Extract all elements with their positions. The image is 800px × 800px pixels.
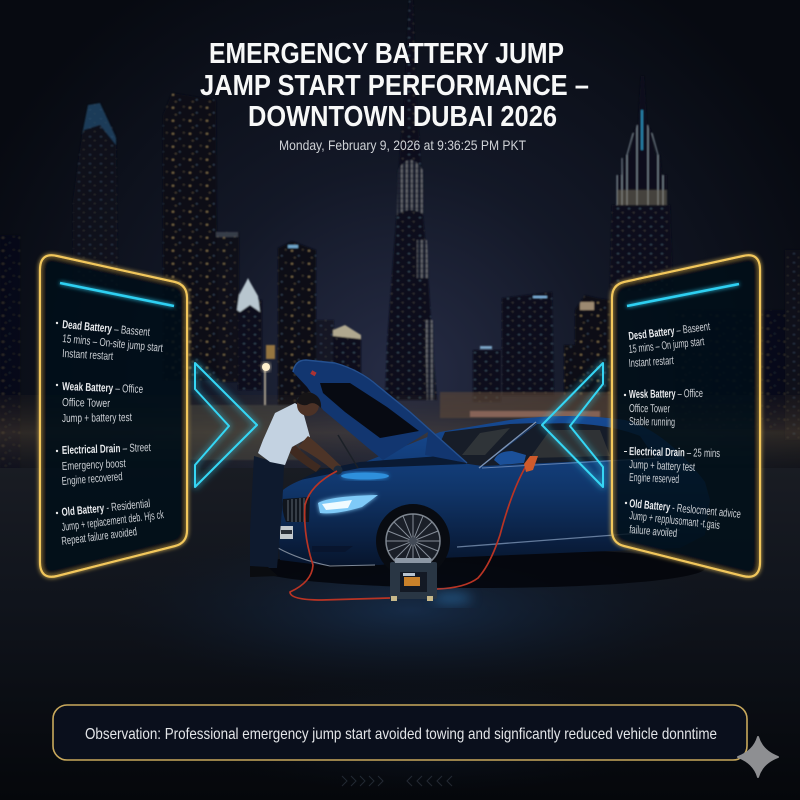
portable jump starter xyxy=(390,558,472,603)
rear arm xyxy=(289,445,321,472)
callout: observation xyxy=(53,705,747,760)
headlight xyxy=(318,495,378,513)
list: left panel text: Dead Battery – Bassent xyxy=(62,319,151,339)
car body xyxy=(278,416,710,565)
list: right panel text: Stable running xyxy=(629,416,675,429)
head xyxy=(297,394,319,416)
title: JAMP START PERFORMANCE – xyxy=(200,70,589,102)
Dubai skyline xyxy=(0,0,800,475)
list: left panel text: Electrical Drain – Street xyxy=(62,442,152,457)
windows xyxy=(436,423,537,466)
list: left panel text: Jump + replacement deb. Hjs ck xyxy=(61,509,165,534)
list: left panel text: Office Tower xyxy=(62,397,110,410)
icon: sparkle star xyxy=(738,737,778,777)
list: right panel text: Old Battery - Reslocment advice xyxy=(629,498,741,521)
date subtitle: Monday, February 9, 2026 at 9:36:25 PM PKT xyxy=(279,137,526,153)
shirt xyxy=(258,403,310,465)
title: DOWNTOWN DUBAI 2026 xyxy=(248,101,557,133)
list: left panel text: Old Battery - Residential xyxy=(61,498,151,519)
list: left panel text: Emergency boost xyxy=(62,458,127,473)
list: left panel text: Engine recovered xyxy=(61,471,123,488)
ground xyxy=(0,468,800,800)
arrow: left chevron xyxy=(195,363,257,487)
cable clamp xyxy=(524,456,538,472)
list: right panel text xyxy=(624,321,741,540)
bumper xyxy=(312,546,353,552)
number plate xyxy=(280,526,293,539)
engine bay glow xyxy=(300,456,467,480)
list: left panel text: 15 mins – On-site jump start xyxy=(62,333,164,355)
list: left panel text xyxy=(56,319,165,548)
mechanic xyxy=(250,392,342,577)
list: right panel text: Electrical Drain – 25 mins xyxy=(629,446,720,460)
car with open hood xyxy=(255,360,710,588)
list: left panel text: Instant restart xyxy=(62,348,114,363)
trousers xyxy=(250,456,284,568)
open hood xyxy=(293,360,467,463)
shoes xyxy=(250,566,278,577)
panel: left service list xyxy=(40,255,187,577)
list: right panel text: Jump + battery test xyxy=(629,459,696,474)
list: right panel text: Instant restart xyxy=(628,355,675,370)
list: right panel text: Engine reserved xyxy=(629,472,679,486)
list: right panel text: Desd Battery – Baseent xyxy=(628,321,711,343)
wheel xyxy=(376,504,450,578)
title: EMERGENCY BATTERY JUMP xyxy=(209,38,564,70)
list: left panel text: Jump + battery test xyxy=(62,412,133,425)
grille xyxy=(282,497,310,522)
right spire tower xyxy=(610,76,673,290)
list: right panel text: Wesk Battery – Office xyxy=(629,388,703,401)
panel accent line xyxy=(627,284,739,306)
list: right panel text: failure avoiled xyxy=(629,524,678,540)
panel: right service list xyxy=(612,255,760,577)
panel accent line xyxy=(60,283,174,306)
list: right panel text: Office Tower xyxy=(629,403,670,415)
title xyxy=(200,38,589,133)
jumper cables xyxy=(290,466,526,600)
bottom decorative chevrons xyxy=(342,776,452,786)
side mirror xyxy=(494,451,526,465)
Burj Khalifa tower xyxy=(385,0,437,400)
list: left panel text: Weak Battery – Office xyxy=(62,381,143,396)
list: right panel text: 15 mins – On jump start xyxy=(628,336,705,356)
street level city glow xyxy=(0,395,800,470)
list: right panel text: Jump + repplusomant -t.gais xyxy=(629,510,721,532)
arrow: right chevron xyxy=(542,363,603,487)
sill line xyxy=(457,530,680,547)
front arm xyxy=(298,436,341,472)
list: left panel text: Repeat failure avoided xyxy=(61,526,138,548)
